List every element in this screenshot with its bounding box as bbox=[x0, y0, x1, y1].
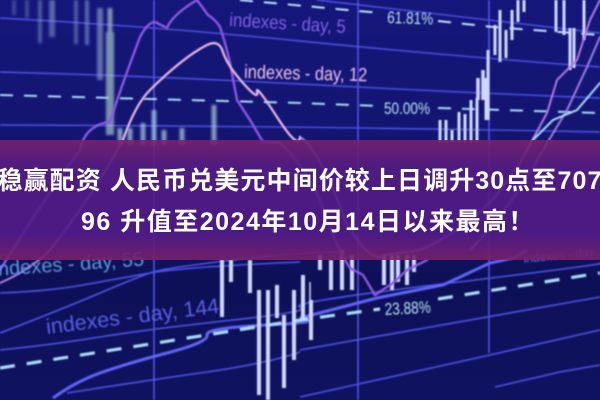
label: 23.88%: 23.88% bbox=[384, 298, 432, 319]
title line 2: 96 升值至2024年10月14日以来最高！ bbox=[81, 208, 535, 236]
title line 1: 稳赢配资 人民币兑美元中间价较上日调升30点至707 bbox=[0, 167, 600, 195]
white candlesticks bbox=[222, 0, 584, 400]
label: indexes day 5: indexes - day, 5 bbox=[229, 9, 347, 37]
purple title band bbox=[0, 140, 600, 260]
moving average curves bbox=[0, 0, 600, 295]
label: 50.00%: 50.00% bbox=[384, 100, 430, 118]
faded candlesticks top left bbox=[14, 0, 214, 145]
label: 61.81%: 61.81% bbox=[387, 9, 434, 29]
label: indexes day 144: indexes - day, 144 bbox=[45, 294, 220, 339]
label: indexes day 12: indexes - day, 12 bbox=[244, 61, 368, 86]
